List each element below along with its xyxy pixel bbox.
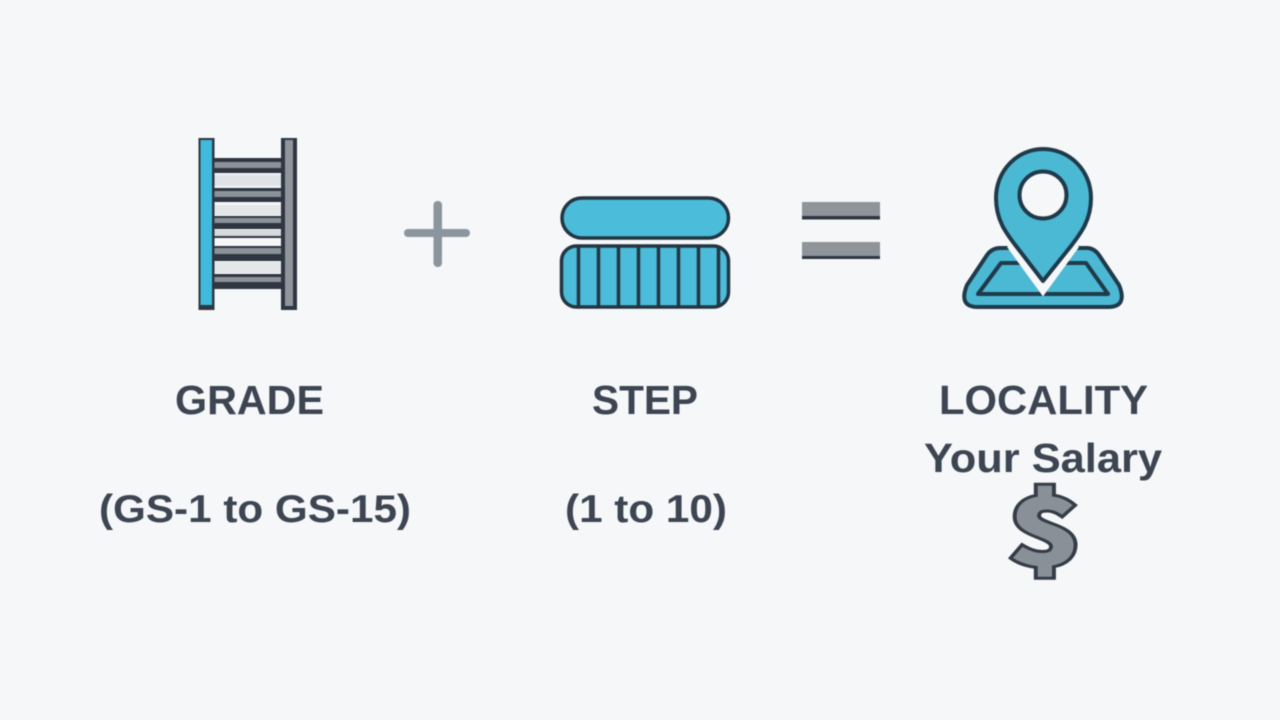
icon: equals sign bbox=[802, 202, 880, 259]
text: step range: (1 to 10) bbox=[565, 488, 727, 531]
icon: dollar sign: $ bbox=[1008, 457, 1082, 592]
heading: locality: LOCALITY bbox=[939, 377, 1148, 423]
heading: grade: GRADE bbox=[175, 377, 324, 423]
heading: your salary: Your Salary bbox=[924, 435, 1162, 481]
icon: grade ladder bbox=[198, 138, 297, 310]
icon: plus sign bbox=[404, 201, 470, 267]
icon: locality map pin bbox=[964, 149, 1122, 307]
heading: step: STEP bbox=[592, 377, 698, 423]
icon: step blocks bbox=[562, 198, 728, 307]
text: grade range: (GS-1 to GS-15) bbox=[99, 488, 411, 531]
